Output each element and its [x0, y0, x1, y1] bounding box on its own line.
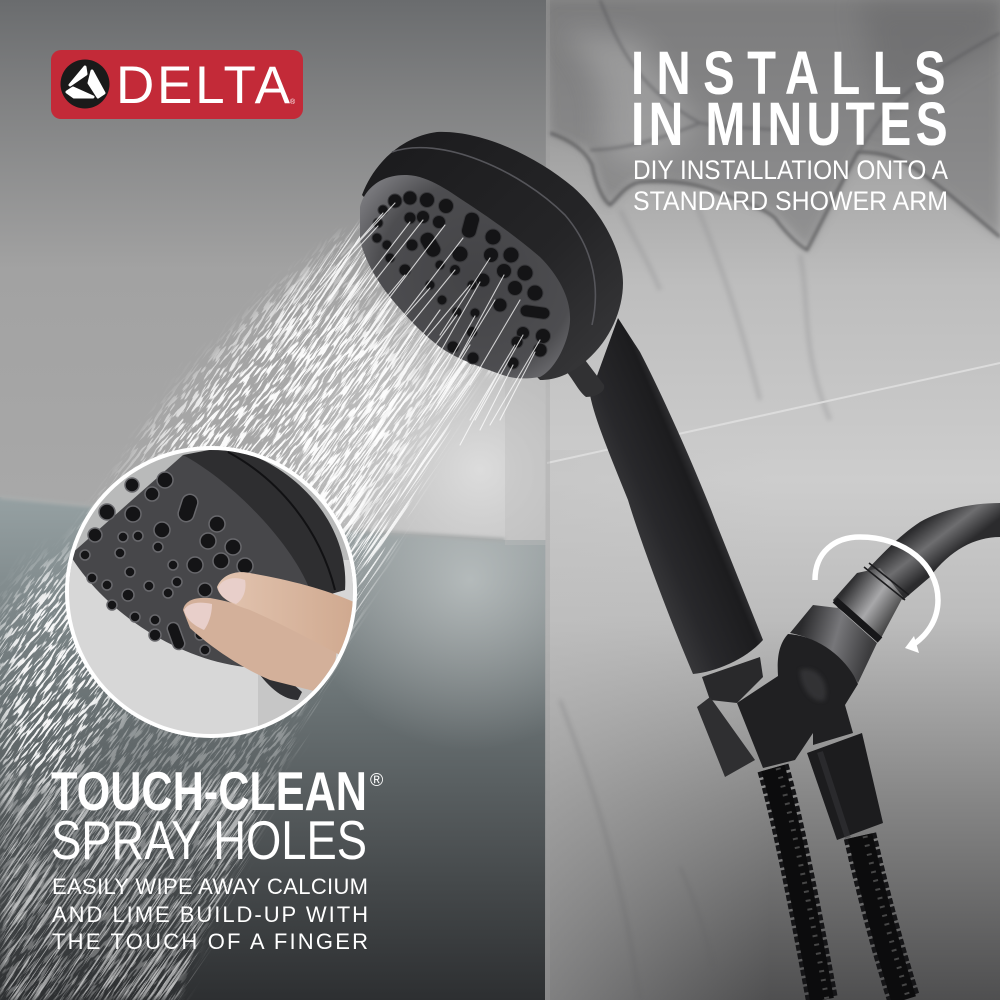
spray holes: [372, 191, 551, 369]
logo: DELTA: ®: [290, 98, 296, 106]
description text: AND LIME BUILD-UP WITH: [52, 902, 368, 927]
left wall background: [0, 0, 551, 1000]
wall mount holder and arm: [697, 503, 1000, 1000]
upper finger: [217, 572, 353, 654]
heading: touch-clean spray holes: TOUCH-CLEAN: [51, 760, 367, 822]
logo wordmark: DELTA: [116, 56, 291, 115]
water jets on head: [310, 203, 540, 445]
logo: DELTA: [51, 50, 303, 119]
handle: [590, 318, 763, 674]
description text: EASILY WIPE AWAY CALCIUM: [52, 874, 368, 899]
heading: touch-clean spray holes: SPRAY HOLES: [51, 809, 367, 871]
logo mark: [60, 60, 110, 108]
water spray: [229, 516, 320, 626]
trigger lever: [562, 356, 604, 397]
heading: touch-clean spray holes: ®: [370, 770, 383, 790]
heading: touch-clean spray holes: [51, 760, 383, 954]
arrow: rotation: [815, 537, 938, 653]
head face: [360, 175, 570, 378]
subheading text: DIY INSTALLATION ONTO A: [633, 155, 948, 185]
right marble wall background: [540, 0, 1000, 1000]
right hose: [860, 836, 909, 1000]
left hose: [773, 768, 827, 1000]
hand shower: [310, 132, 763, 674]
description text: [52, 874, 368, 954]
inset shower head shell: [183, 447, 345, 600]
silver nut: [833, 568, 903, 640]
swivel body: [737, 634, 858, 768]
inset circle: touch-clean close-up: [60, 440, 360, 750]
lower finger: [183, 598, 337, 695]
hose cone: [807, 733, 883, 840]
handle connector: [702, 657, 763, 703]
inset lever: [260, 676, 302, 700]
description text: THE TOUCH OF A FINGER: [52, 929, 368, 954]
textured collar: [790, 605, 877, 683]
inset spray holes: [80, 472, 253, 655]
inset shower head face: [70, 455, 310, 668]
shower arm: [867, 503, 1000, 600]
head shell: [362, 132, 623, 380]
heading: installs in minutes: [631, 39, 958, 216]
fingernails: [218, 578, 246, 604]
heading: installs in minutes: STANDARD SHOWER ARM: [633, 186, 948, 216]
back clip: [697, 697, 755, 777]
